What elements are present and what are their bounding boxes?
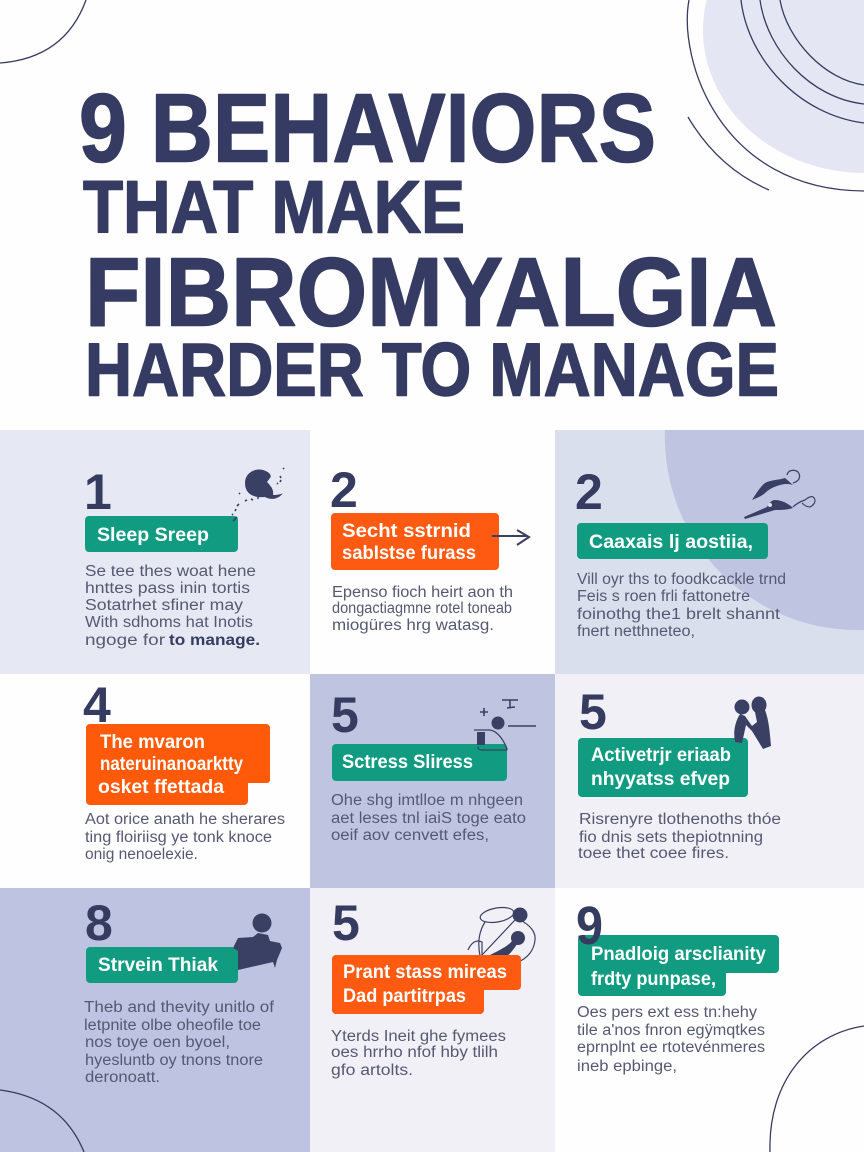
heading badge bbox=[578, 738, 748, 797]
icon: sleeping head bbox=[232, 468, 284, 521]
heading badge: sabIstse furass bbox=[342, 542, 476, 564]
heading badge bbox=[578, 935, 779, 996]
decorative arc bbox=[0, 1090, 84, 1152]
heading badge bbox=[332, 955, 521, 1014]
body text: tile a'nos fnron egÿmqtkes bbox=[577, 1022, 765, 1039]
heading badge bbox=[332, 744, 507, 781]
panel 3 bbox=[555, 430, 864, 674]
body text: onig nenoelexie. bbox=[85, 846, 198, 863]
body text: oeif aov cenvett efes, bbox=[331, 827, 489, 844]
panel 2 bbox=[310, 430, 555, 674]
body text: hnttes pass inin tortis bbox=[85, 580, 250, 597]
body text bbox=[85, 563, 260, 649]
body text: nos toye oen byoel, bbox=[85, 1034, 230, 1051]
body text: aet leses tnl iaiS toge eato bbox=[331, 810, 526, 827]
title line: harder to manage: HARDER TO MANAGE bbox=[85, 328, 779, 412]
body text: Aot orice anath he sherares bbox=[85, 811, 285, 828]
heading badge bbox=[577, 523, 768, 559]
icon: person at desk bbox=[474, 700, 536, 750]
heading badge: The mvaron bbox=[100, 731, 205, 753]
heading badge: Activetrjr eriaab bbox=[591, 744, 731, 766]
body text: dongactiagmne rotel toneab bbox=[332, 600, 512, 617]
body text bbox=[332, 584, 513, 634]
body text: With sdhoms hat Inotis bbox=[85, 614, 253, 631]
body text bbox=[578, 811, 781, 862]
heading badge: osket ffettada bbox=[98, 776, 224, 798]
title line: that make: THAT MAKE bbox=[83, 166, 465, 248]
body text: hyesluntb oy tnons tnore bbox=[85, 1052, 263, 1069]
body text: ineb epbinge, bbox=[577, 1058, 677, 1075]
heading badge: Secht sstrnid bbox=[342, 520, 471, 542]
panel 7 bbox=[0, 888, 310, 1152]
body text: eprnplnt ee rtotevénmeres bbox=[577, 1039, 765, 1056]
number 2: 2 bbox=[575, 464, 603, 520]
number 5: 5 bbox=[579, 684, 607, 740]
number 4: 4 bbox=[83, 677, 111, 733]
number 2: 2 bbox=[330, 462, 358, 518]
heading badge: nateruinanoarktty bbox=[100, 753, 243, 775]
heading badge: Sctress Sliress bbox=[342, 751, 473, 773]
body text: Theb and thevity unitlo of bbox=[84, 999, 275, 1016]
body text: oes hrrho nfof hby tlilh bbox=[331, 1044, 498, 1061]
number 9: 9 bbox=[576, 896, 603, 956]
number 5: 5 bbox=[332, 895, 360, 951]
top-left decorative arc bbox=[0, 0, 86, 63]
heading badge bbox=[86, 724, 270, 805]
title bbox=[79, 74, 779, 412]
heading badge bbox=[331, 513, 499, 570]
body text: toee thet coee fires. bbox=[578, 845, 729, 862]
body text: Ohe shg imtlloe m nhgeen bbox=[331, 792, 523, 809]
body text: Yterds Ineit ghe fymees bbox=[331, 1028, 506, 1045]
decorative circle bbox=[665, 430, 864, 630]
body text: to manage. bbox=[169, 632, 260, 649]
icon: seated person bbox=[233, 914, 282, 970]
heading badge bbox=[86, 947, 238, 983]
heading badge: Sleep Sreep bbox=[97, 524, 209, 546]
heading badge bbox=[85, 516, 238, 552]
body text: letpnite olbe oheofile toe bbox=[84, 1017, 261, 1034]
number 8: 8 bbox=[85, 895, 113, 951]
icon: two figures bbox=[734, 696, 771, 749]
body text: Epenso fioch heirt aon th bbox=[332, 584, 513, 601]
body text bbox=[84, 999, 275, 1086]
heading badge: frdty punpase, bbox=[591, 968, 716, 990]
body text: Risrenyre tlothenoths thóe bbox=[579, 811, 781, 828]
body text: foinothg the1 brelt shannt bbox=[577, 606, 781, 623]
body text: ting floiriisg ye tonk knoce bbox=[85, 829, 272, 846]
body text bbox=[577, 1004, 765, 1075]
body text: Vill oyr ths to foodkcackle trnd bbox=[577, 571, 786, 588]
heading badge: Pnadloig arsclianity bbox=[591, 943, 766, 965]
body text: Sotatrhet sfiner may bbox=[85, 597, 243, 614]
body text: deronoatt. bbox=[85, 1069, 160, 1086]
heading badge: Caaxais lj aostiia, bbox=[589, 531, 753, 553]
heading badge: nhyyatss efvep bbox=[591, 768, 730, 790]
decorative arc bbox=[770, 1026, 864, 1152]
panel 5: stress bbox=[310, 674, 555, 888]
title line: fibromyalgia: FIBROMYALGIA bbox=[85, 238, 777, 346]
body text: Oes pers ext ess tn:hehy bbox=[577, 1004, 757, 1021]
panel 1: sleep bbox=[0, 430, 310, 674]
body text bbox=[85, 811, 285, 863]
body text: gfo artolts. bbox=[331, 1062, 413, 1079]
body text: fnert netthneteo, bbox=[577, 623, 695, 640]
top-right decorative circle and arcs bbox=[687, 0, 864, 191]
number 1: 1 bbox=[84, 464, 112, 520]
body text: ngoge for bbox=[85, 632, 165, 649]
panel 8 bbox=[310, 888, 555, 1152]
icon: reclining figure bbox=[744, 470, 815, 519]
body text: fio dnis sets thepiotnning bbox=[579, 829, 763, 846]
panel 9 bbox=[555, 888, 864, 1152]
body text: Feis s roen frli fattonetre bbox=[577, 588, 750, 605]
arrow bbox=[492, 530, 529, 545]
heading badge: Prant stass mireas bbox=[343, 961, 507, 983]
heading badge: Strvein Thiak bbox=[98, 954, 218, 976]
icon: figures in a circle bbox=[468, 905, 535, 962]
body text bbox=[331, 792, 526, 844]
panel 6: activity bbox=[555, 674, 864, 888]
body text: Se tee thes woat hene bbox=[85, 563, 256, 580]
body text bbox=[331, 1028, 506, 1079]
heading badge: Dad partitrpas bbox=[343, 985, 466, 1007]
body text: miogüres hrg watasg. bbox=[332, 617, 494, 634]
title line: 9 behaviors: 9 BEHAVIORS bbox=[79, 74, 656, 182]
number 5: 5 bbox=[331, 687, 359, 743]
body text bbox=[577, 571, 786, 640]
panel 4 bbox=[0, 674, 310, 888]
